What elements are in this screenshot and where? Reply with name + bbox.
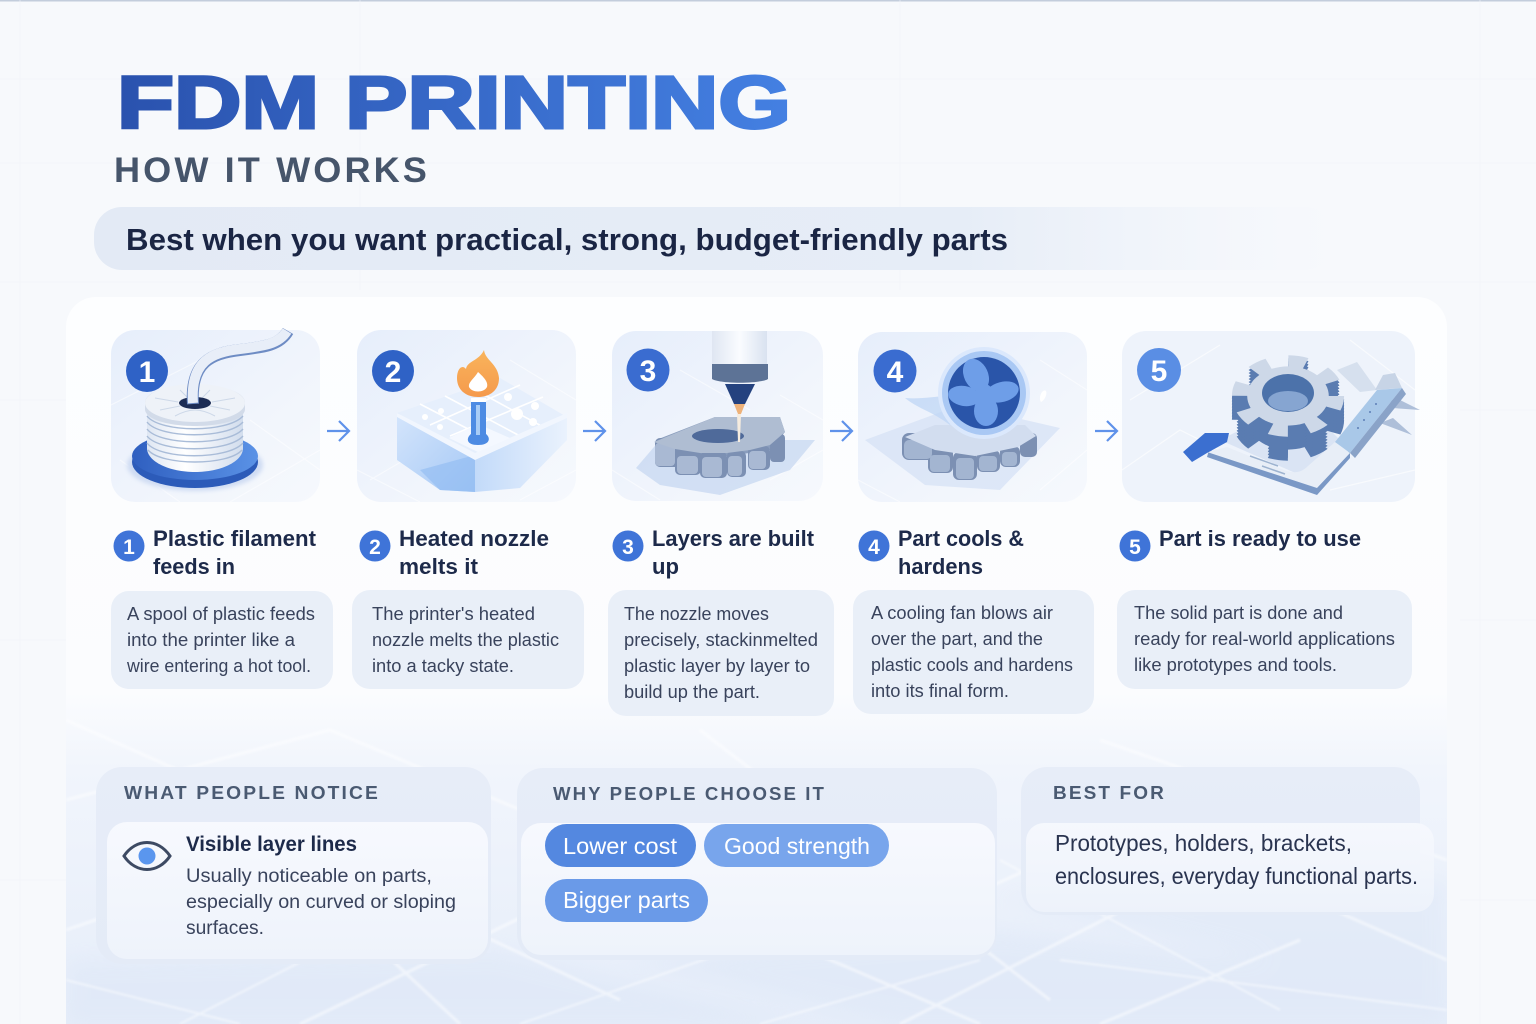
step 3 text: precisely, stackinmelted bbox=[624, 630, 818, 650]
step 2 text: Heated nozzle bbox=[399, 526, 549, 551]
step 4 text: plastic cools and hardens bbox=[871, 655, 1073, 675]
step 4 text: hardens bbox=[898, 554, 983, 579]
badge 4 bbox=[874, 350, 916, 392]
step 5 text: The solid part is done and bbox=[1134, 603, 1343, 623]
badge 2: 2 bbox=[385, 356, 401, 389]
step 3 text bbox=[608, 526, 834, 716]
panel: why people choose it bbox=[517, 768, 997, 960]
step 5 text: ready for real-world applications bbox=[1134, 629, 1395, 649]
step 2 text: melts it bbox=[399, 554, 479, 579]
panel: what people notice: WHAT PEOPLE NOTICE bbox=[124, 783, 380, 803]
panel: what people notice bbox=[96, 767, 491, 964]
panel: best for: enclosures, everyday functional parts. bbox=[1055, 863, 1418, 889]
step 3 text: up bbox=[652, 554, 679, 579]
badge 2 bbox=[372, 350, 414, 392]
step 5 text: like prototypes and tools. bbox=[1134, 655, 1337, 675]
step 3 text: Layers are built bbox=[652, 526, 815, 551]
step 2 text: The printer's heated bbox=[372, 604, 535, 624]
step card 4: cooling fan bbox=[858, 332, 1087, 502]
badge 1: 1 bbox=[139, 356, 155, 389]
step card 3: layers built bbox=[612, 331, 823, 501]
chip: lower cost: Lower cost bbox=[563, 833, 678, 859]
badge 5 bbox=[1137, 348, 1181, 392]
step 1 text: wire entering a hot tool. bbox=[126, 656, 311, 676]
arrow 1 bbox=[327, 421, 349, 441]
panel: best for bbox=[1021, 767, 1434, 915]
chip: good strength: Good strength bbox=[724, 833, 870, 859]
step 4 text bbox=[853, 526, 1094, 714]
step 4 text: Part cools & bbox=[898, 526, 1024, 551]
step 3 text: build up the part. bbox=[624, 682, 760, 702]
main panel bbox=[66, 814, 1447, 1024]
panel: what people notice: especially on curved or sloping bbox=[186, 892, 456, 913]
chip: bigger parts bbox=[545, 879, 708, 922]
badge 5: 5 bbox=[1151, 355, 1167, 388]
step 2 text: into a tacky state. bbox=[372, 656, 514, 676]
step 1 text bbox=[111, 526, 333, 689]
tagline banner: Best when you want practical, strong, budget-friendly parts bbox=[126, 222, 1008, 257]
step 1 text: A spool of plastic feeds bbox=[127, 604, 315, 624]
panel: what people notice: Visible layer lines bbox=[186, 833, 357, 856]
step 4 text: 4 bbox=[868, 536, 880, 559]
badge 1 bbox=[126, 350, 168, 392]
icon: spool bbox=[127, 331, 288, 491]
step 3 text: 3 bbox=[622, 536, 634, 559]
icon: eye bbox=[124, 842, 170, 870]
panel: best for: Prototypes, holders, brackets, bbox=[1055, 830, 1352, 856]
step 1 text: into the printer like a bbox=[127, 630, 296, 650]
chip: lower cost bbox=[545, 824, 696, 867]
subtitle: HOW IT WORKS bbox=[114, 151, 430, 190]
step 5 text: Part is ready to use bbox=[1159, 526, 1361, 551]
step card 1: filament spool bbox=[111, 330, 320, 502]
step 2 text bbox=[352, 526, 584, 689]
badge 3: 3 bbox=[640, 355, 656, 388]
arrow 3 bbox=[830, 421, 852, 441]
icon: fan and gear bbox=[865, 347, 1060, 490]
step card 2: heated nozzle bbox=[357, 330, 576, 502]
icon: nozzle and gear bbox=[636, 331, 815, 495]
icon: gear and caliper bbox=[1183, 362, 1420, 495]
panel: what people notice: Usually noticeable on parts, bbox=[186, 866, 432, 887]
step 2 text: 2 bbox=[369, 536, 381, 559]
step 5 text: 5 bbox=[1129, 536, 1141, 559]
panel: best for: BEST FOR bbox=[1053, 783, 1166, 803]
step 3 text: The nozzle moves bbox=[624, 604, 769, 624]
tagline banner bbox=[94, 207, 1334, 270]
step 4 text: into its final form. bbox=[871, 681, 1009, 701]
step 4 text: over the part, and the bbox=[871, 629, 1043, 649]
step 4 text: A cooling fan blows air bbox=[871, 603, 1053, 623]
badge 3 bbox=[626, 348, 670, 392]
step card 5: finished part bbox=[1122, 331, 1420, 502]
step 2 text: nozzle melts the plastic bbox=[372, 630, 559, 650]
badge 4: 4 bbox=[887, 356, 904, 389]
chip: bigger parts: Bigger parts bbox=[563, 887, 690, 913]
icon: block and flame bbox=[397, 350, 567, 492]
arrow 2 bbox=[583, 421, 605, 441]
step 1 text: Plastic filament bbox=[153, 526, 317, 551]
panel: why people choose it: WHY PEOPLE CHOOSE IT bbox=[553, 784, 826, 804]
step 3 text: plastic layer by layer to bbox=[624, 656, 810, 676]
title: FDM PRINTING bbox=[117, 61, 791, 144]
step 5 text bbox=[1117, 526, 1412, 689]
panel: what people notice: surfaces. bbox=[186, 918, 264, 939]
arrow 4 bbox=[1095, 421, 1117, 441]
step 1 text: 1 bbox=[123, 536, 135, 559]
step 1 text: feeds in bbox=[153, 554, 235, 579]
chip: good strength bbox=[704, 824, 889, 867]
